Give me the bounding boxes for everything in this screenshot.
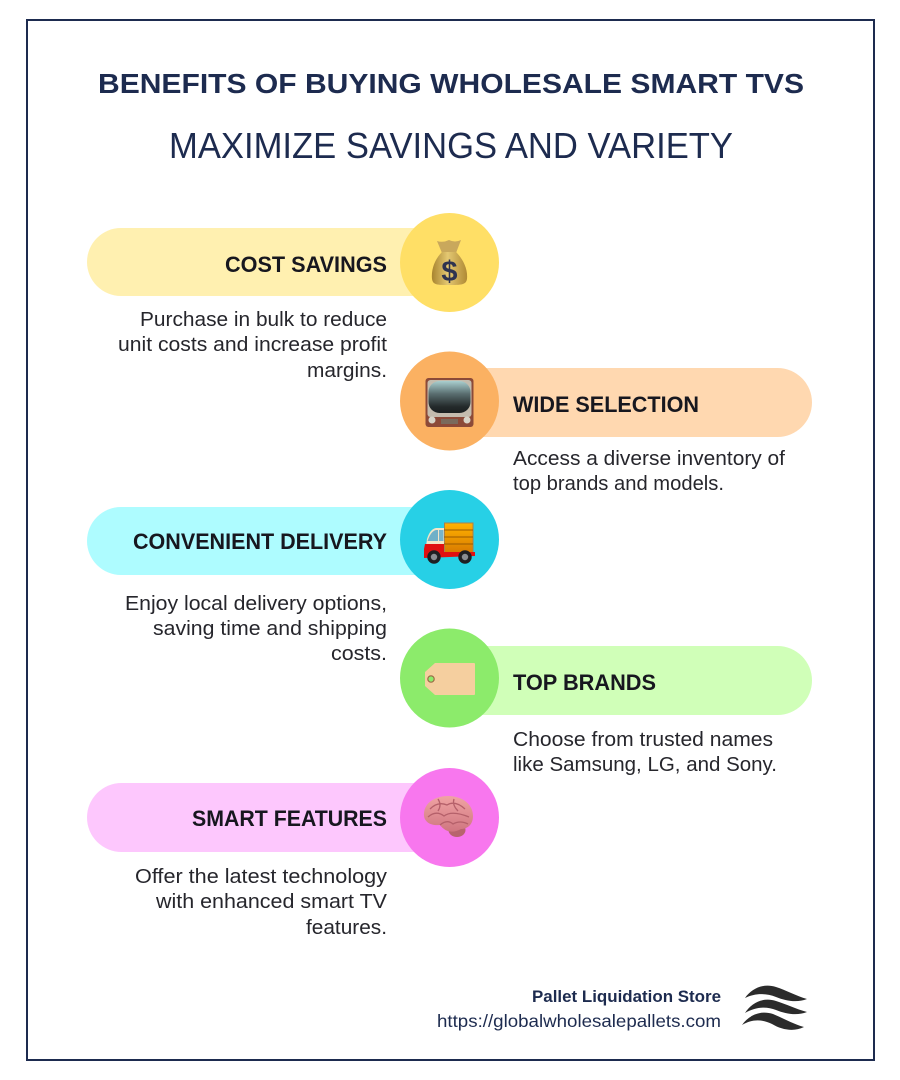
text: wide selection: top brands and models.	[513, 473, 724, 495]
text: top brands: like Samsung, LG, and Sony.	[513, 754, 777, 776]
text: cost savings	[118, 309, 387, 382]
text: top brands	[513, 729, 777, 776]
heading: wide selection: WIDE SELECTION	[513, 392, 699, 417]
footer: store url: https://globalwholesalepallets.com	[437, 1011, 721, 1031]
text: convenient delivery: saving time and shipping	[153, 618, 387, 640]
text: cost savings: unit costs and increase profit	[118, 334, 387, 356]
heading: smart features: SMART FEATURES	[192, 806, 387, 831]
pill: top brands	[432, 646, 812, 715]
panel: wide selection	[400, 352, 812, 495]
text: cost savings: Purchase in bulk to reduce	[140, 309, 387, 331]
icon: money bag	[432, 240, 467, 288]
pill: cost savings	[87, 228, 467, 296]
icon circle: convenient delivery	[400, 490, 499, 589]
icon: wave logo	[742, 986, 807, 1030]
heading: top brands: TOP BRANDS	[513, 670, 656, 695]
text: smart features: features.	[306, 917, 387, 939]
panel: smart features	[87, 768, 499, 939]
heading: convenient delivery: CONVENIENT DELIVERY	[133, 529, 387, 554]
heading: cost savings: COST SAVINGS	[225, 252, 387, 277]
icon circle: smart features	[400, 768, 499, 867]
panel: cost savings	[87, 213, 499, 382]
text: top brands: Choose from trusted names	[513, 729, 773, 751]
pill: smart features	[87, 783, 467, 852]
icon: brain	[424, 796, 473, 837]
text: wide selection: Access a diverse inventory of	[513, 448, 785, 470]
pill: wide selection	[432, 368, 812, 437]
text: smart features	[135, 866, 388, 939]
text: wide selection	[513, 448, 785, 495]
text: cost savings: margins.	[307, 360, 387, 382]
text: convenient delivery: costs.	[331, 643, 387, 665]
icon: television	[426, 378, 474, 427]
icon circle: wide selection	[400, 352, 499, 450]
text: convenient delivery	[125, 593, 387, 665]
subtitle: MAXIMIZE SAVINGS AND VARIETY	[169, 125, 733, 166]
title: BENEFITS OF BUYING WHOLESALE SMART TVS	[98, 68, 804, 99]
panel: convenient delivery	[87, 490, 499, 665]
text: smart features: with enhanced smart TV	[155, 891, 388, 913]
footer: store name: Pallet Liquidation Store	[532, 988, 721, 1006]
icon: money bag: $	[441, 256, 458, 288]
icon circle: cost savings	[400, 213, 499, 312]
icon: price tag	[425, 663, 475, 695]
panel: top brands	[400, 628, 812, 776]
icon: delivery truck	[424, 523, 475, 564]
text: smart features: Offer the latest technology	[135, 866, 387, 888]
icon circle: top brands	[400, 628, 499, 728]
text: convenient delivery: Enjoy local delivery options,	[125, 593, 387, 615]
pill: convenient delivery	[87, 507, 467, 575]
